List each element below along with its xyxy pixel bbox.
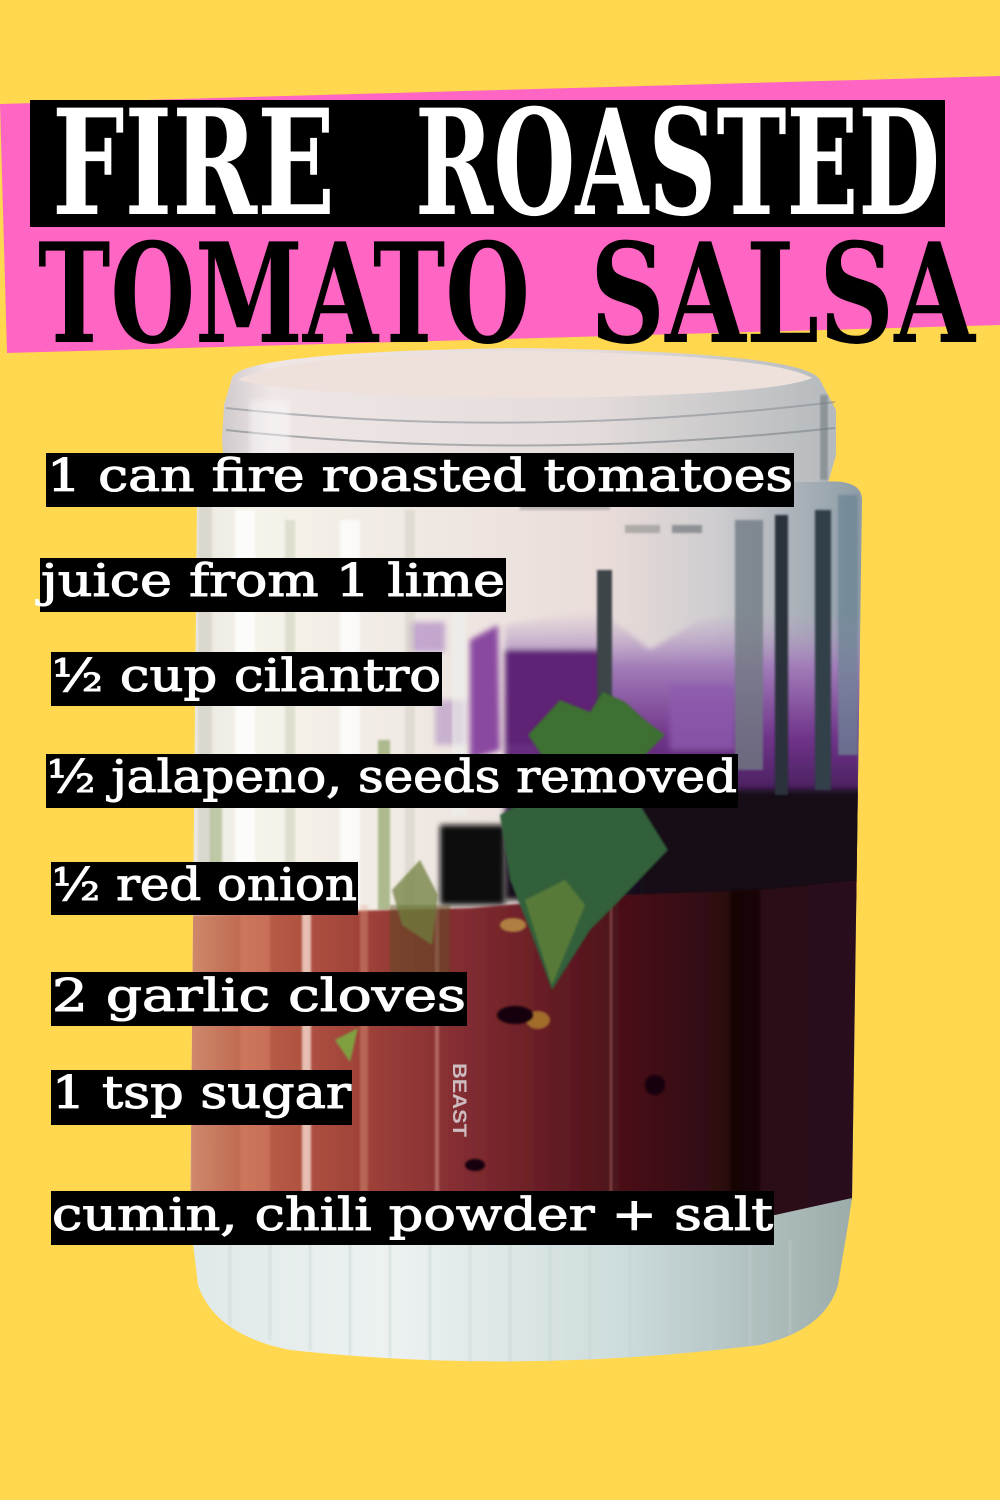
ingredient 7: 1 tsp sugar bbox=[52, 1066, 352, 1119]
ingredient list bbox=[35, 449, 794, 1245]
salsa flecks bbox=[465, 1006, 665, 1171]
jar rim bbox=[222, 348, 836, 490]
white jar base bbox=[190, 1198, 852, 1362]
ingredient 4: ½ jalapeno, seeds removed bbox=[47, 750, 737, 803]
purple cabbage layer bbox=[410, 610, 862, 900]
left pale stripes bbox=[198, 500, 415, 910]
dark right band bbox=[440, 790, 865, 905]
BEAST wordmark: BEAST bbox=[448, 1063, 469, 1137]
title line two: TOMATO bbox=[38, 212, 530, 375]
ingredient 3: ½ cup cilantro bbox=[52, 649, 441, 702]
title line one bbox=[30, 78, 945, 249]
blender jar bbox=[190, 348, 865, 1362]
title line one: FIRE bbox=[52, 78, 335, 249]
glass ribs bbox=[452, 495, 858, 815]
ingredient 5: ½ red onion bbox=[52, 858, 357, 911]
title bbox=[30, 78, 976, 375]
pink title banner bbox=[0, 76, 1000, 353]
cilantro leaves bbox=[335, 692, 668, 1062]
salsa liquid bbox=[190, 880, 862, 1240]
ingredient 1: 1 can fire roasted tomatoes bbox=[47, 449, 793, 502]
ingredient 2: juice from 1 lime bbox=[35, 554, 505, 607]
ingredient 6: 2 garlic cloves bbox=[52, 969, 466, 1022]
jar glass body bbox=[190, 475, 865, 1245]
ingredient 8: cumin, chili powder + salt bbox=[52, 1188, 773, 1241]
